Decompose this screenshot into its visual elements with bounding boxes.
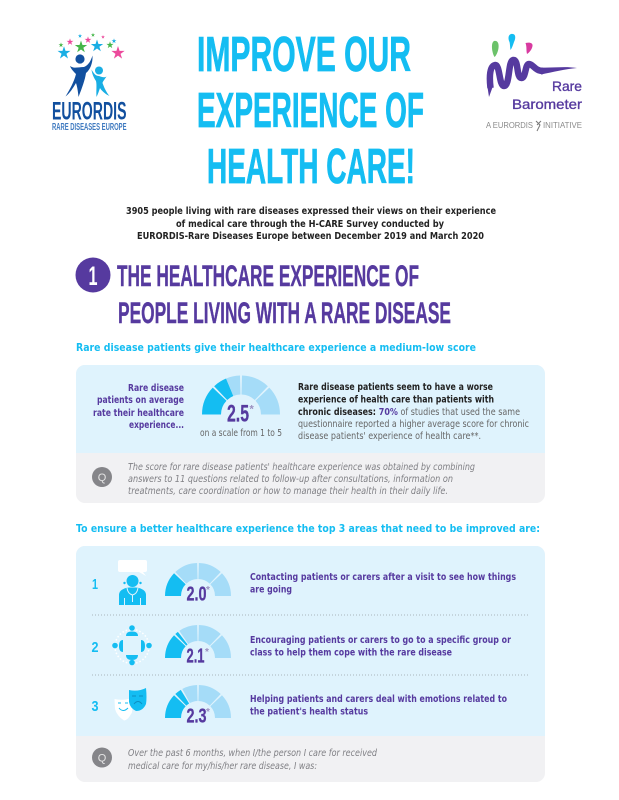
gauge: 2.5	[212, 385, 270, 428]
comparison text: disease patients' experience of health care**.	[298, 431, 481, 442]
section number badge: 1	[88, 261, 98, 291]
title: EXPERIENCE OF	[197, 84, 424, 138]
logo word: Barometer: Barometer	[512, 96, 582, 112]
logo: Rare Barometer	[486, 34, 582, 131]
row 3 number: 3	[92, 698, 98, 715]
icon: theatre masks	[114, 688, 146, 720]
comparison text: questionnaire reported a higher average score for chronic	[298, 419, 529, 430]
subheading: top 3 areas: To ensure a better healthcare experience the top 3 areas that need to be improved are:	[76, 522, 540, 535]
logo strapline	[486, 121, 582, 131]
question note: The score for rare disease patients' healthcare experience was obtained by combining	[128, 462, 475, 473]
panel background	[76, 546, 545, 782]
title	[197, 28, 424, 194]
gauge: 2.3	[173, 693, 223, 728]
section heading	[117, 260, 451, 330]
row 2 text: Encouraging patients or carers to go to a specific group or	[250, 635, 511, 646]
row 3 text	[250, 694, 507, 718]
panel background	[76, 365, 545, 503]
logo strapline: A EURORDIS	[486, 121, 533, 130]
title: IMPROVE OUR	[197, 28, 411, 82]
row 1 text	[250, 572, 516, 596]
gauge: 2.5: *	[250, 404, 254, 416]
question note: answers to 11 questions related to follow-up after consultations, information on	[128, 474, 453, 485]
lead text: rate their healthcare	[93, 408, 184, 419]
panel: overall score	[76, 365, 545, 503]
question note	[128, 462, 475, 497]
logo strapline: INITIATIVE	[543, 121, 582, 130]
title: HEALTH CARE!	[207, 140, 415, 194]
row 3 text: Helping patients and carers deal with emotions related to	[250, 694, 507, 705]
gauge: 2.0: 2.0	[186, 584, 206, 606]
icon: purple wave	[487, 60, 577, 97]
comparison text: chronic diseases: 70% of studies that used the same	[298, 407, 520, 418]
icon: stars	[58, 33, 125, 59]
question note: medical care for my/his/her rare disease, I was:	[128, 761, 317, 772]
comparison text	[298, 382, 529, 442]
gauge: 2.0	[173, 571, 223, 606]
intro text: 3905 people living with rare diseases expressed their views on their experience	[126, 206, 496, 217]
row 2 number: 2	[92, 639, 98, 656]
row 2 text: class to help them cope with the rare disease	[250, 648, 452, 658]
lead text: Rare disease	[128, 383, 184, 394]
lead text: experience...	[129, 420, 184, 431]
question note: Over the past 6 months, when I/the person I care for received	[128, 748, 378, 759]
icon: adult figure	[66, 54, 93, 97]
icon: child figure	[92, 66, 110, 97]
icon: Q badge	[92, 467, 112, 487]
gauge: 2.1	[173, 633, 223, 668]
comparison text: experience of health care than patients with	[298, 394, 494, 406]
icon: group around a table	[112, 625, 152, 665]
logo tagline: RARE DISEASES EUROPE	[52, 122, 127, 133]
subheading: score: Rare disease patients give their healthcare experience a medium-low score	[76, 341, 476, 354]
panel: top 3 areas	[76, 546, 545, 782]
logo word: Rare: Rare	[552, 78, 582, 94]
comparison text: Rare disease patients seem to have a worse	[298, 382, 493, 393]
gauge: 2.1: *	[205, 647, 209, 658]
row 2 text	[250, 635, 511, 658]
intro text: EURORDIS-Rare Diseases Europe between December 2019 and March 2020	[137, 231, 484, 242]
row 1 text: Contacting patients or carers after a visit to see how things	[250, 572, 516, 583]
question note	[128, 748, 378, 772]
gauge: 2.3: *	[206, 707, 210, 718]
gauge: 2.1: 2.1	[186, 646, 204, 668]
gauge: 2.3: 2.3	[186, 706, 206, 728]
logo wordmark: EURORDIS	[52, 98, 126, 126]
scale caption: on a scale from 1 to 5	[200, 428, 282, 439]
icon: Q badge	[92, 748, 112, 768]
section number badge	[76, 258, 110, 292]
gauge: 2.5: 2.5	[227, 400, 249, 428]
lead text: patients on average	[97, 395, 184, 406]
intro text: of medical care through the H-CARE Survey conducted by	[176, 219, 444, 230]
logo: EURORDIS	[52, 33, 127, 133]
gauge: 2.0: *	[206, 585, 210, 596]
icon: doctor with speech bubble	[118, 560, 147, 605]
icon: Q badge: Q	[98, 472, 107, 484]
icon: Q badge: Q	[98, 752, 107, 764]
icon: coloured drops	[492, 34, 533, 57]
intro text	[126, 206, 496, 242]
row 3 text: the patient's health status	[250, 707, 368, 718]
question note: treatments, care coordination or how to manage their health in their daily life.	[128, 486, 448, 497]
row 1 number: 1	[92, 576, 98, 593]
lead text	[93, 383, 184, 431]
row 1 text: are going	[250, 585, 292, 596]
